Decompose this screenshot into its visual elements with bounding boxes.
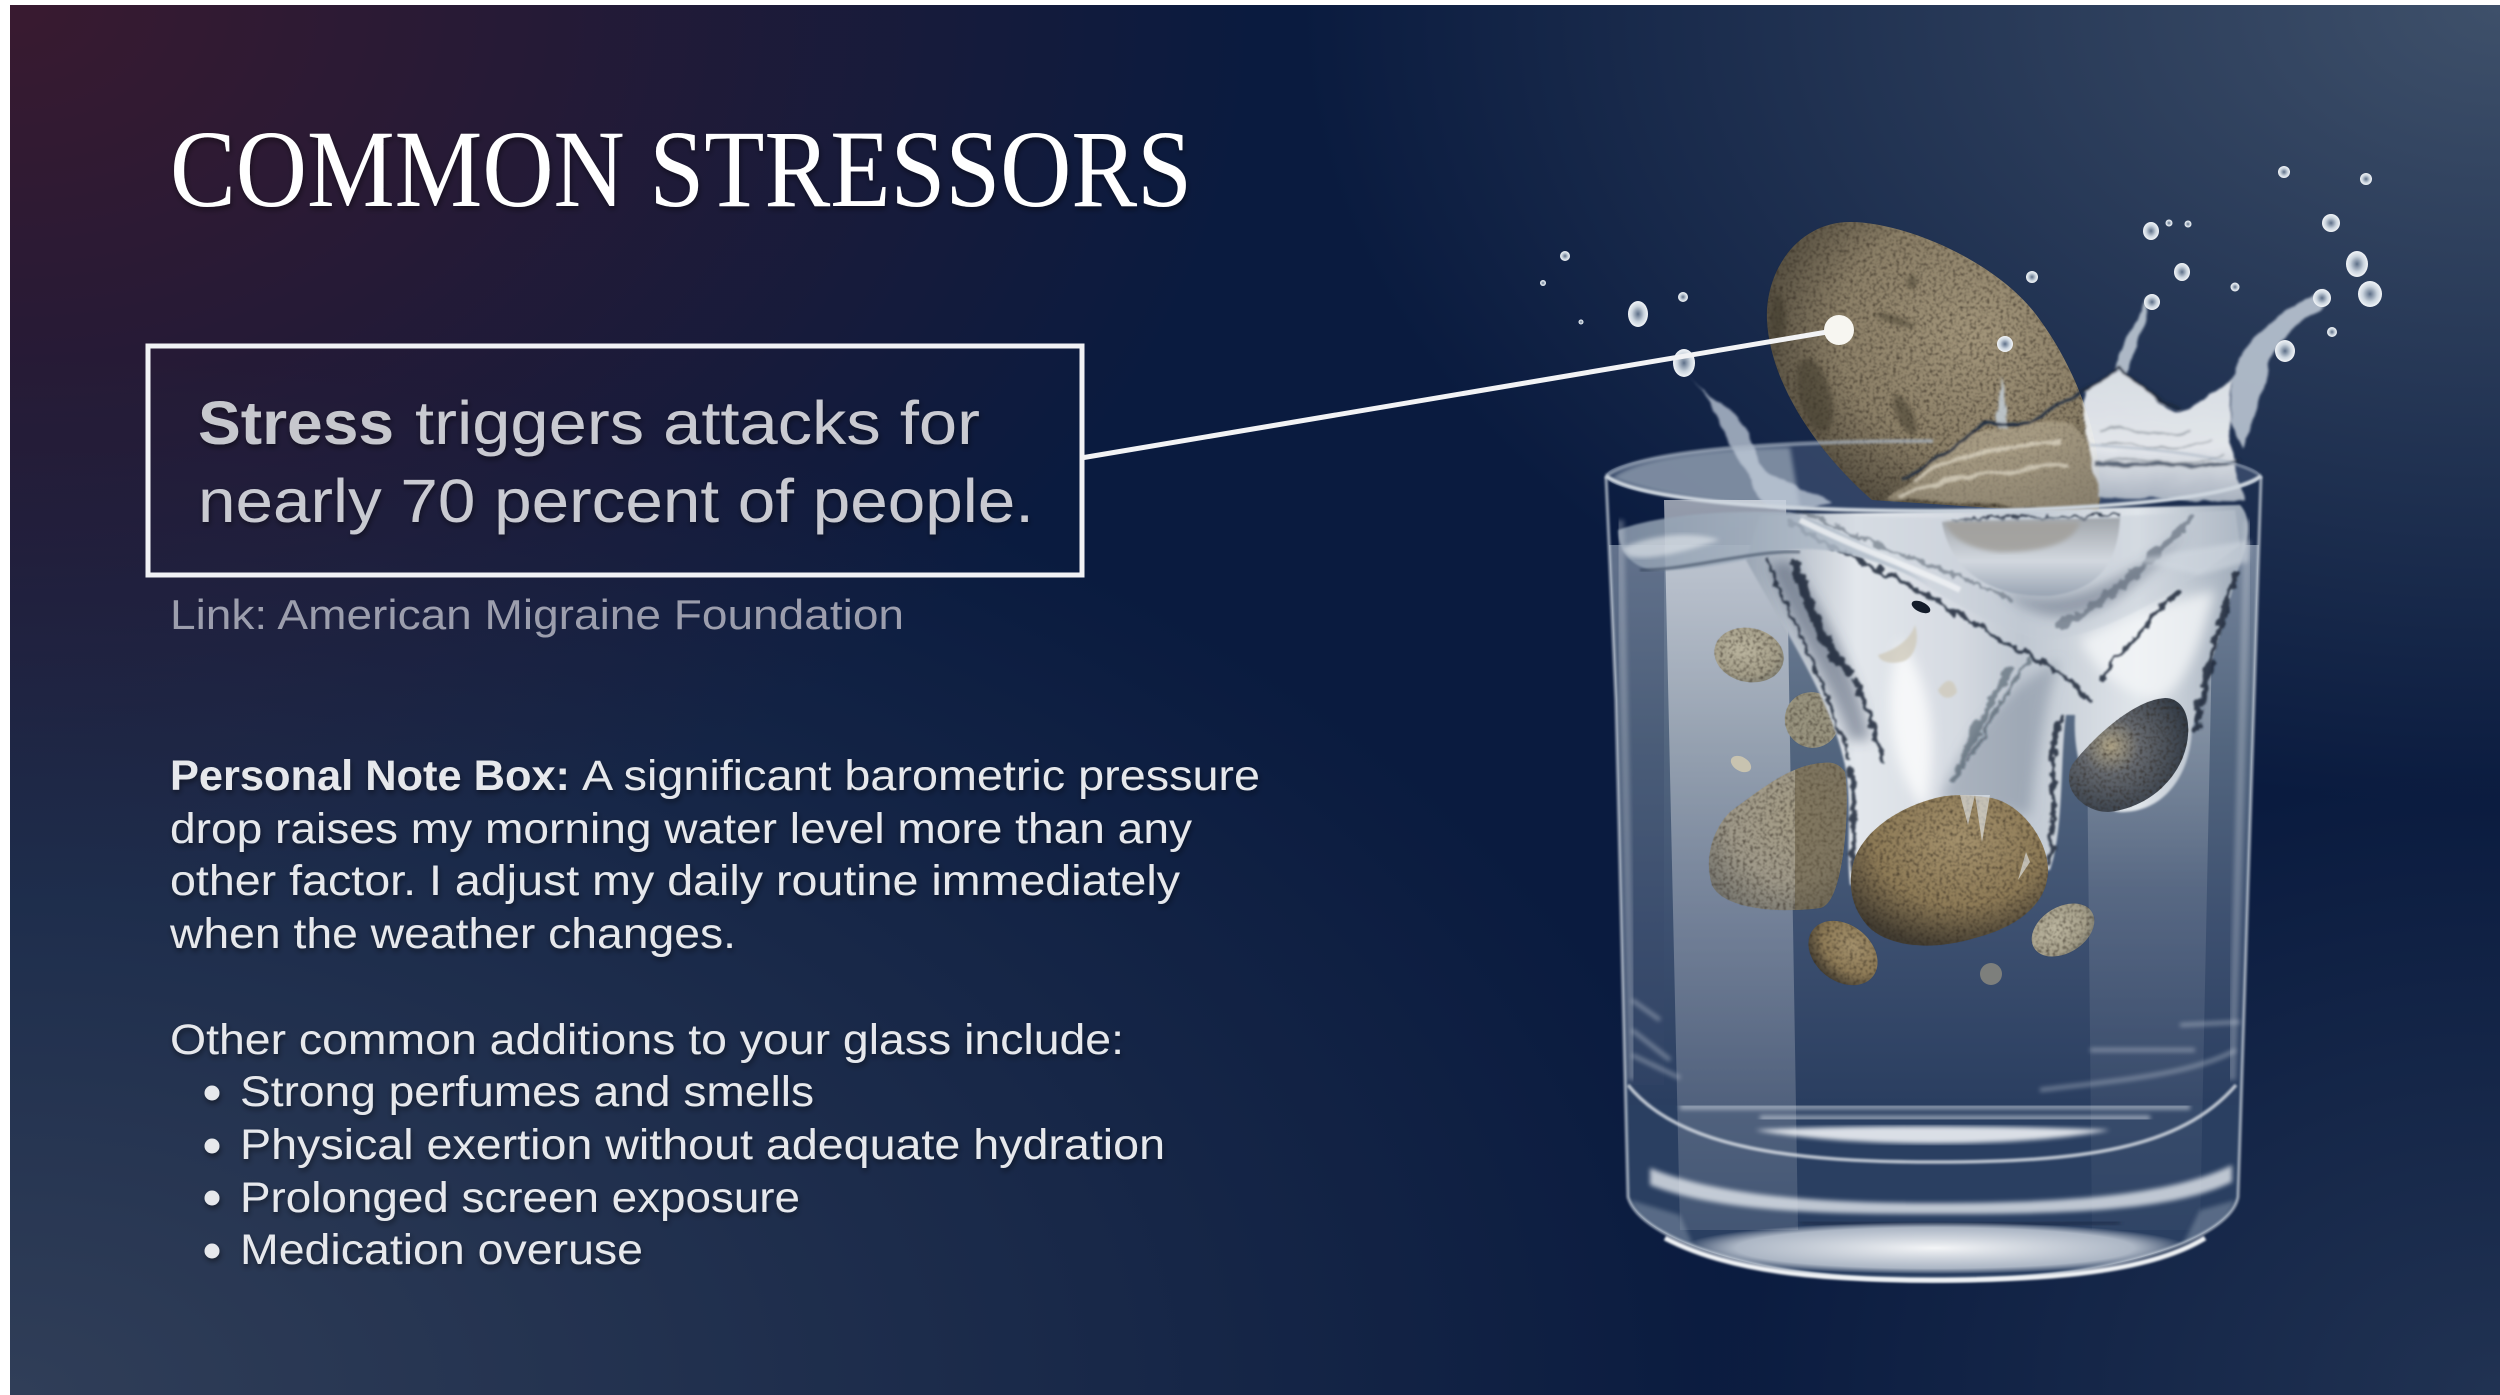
splash crown [1692, 292, 2325, 510]
list item: exertion: Physical exertion without adequate hydration [240, 1121, 1165, 1169]
bright crown [2084, 371, 2244, 500]
personal note text block: other factor. I adjust my daily routine immediately [170, 857, 1181, 905]
glass back wall [1606, 441, 2260, 511]
base upper curve [1628, 1085, 2236, 1162]
callout box: stress statistic [148, 346, 1082, 575]
callout text: Stress [198, 389, 394, 457]
right arm [2230, 292, 2325, 450]
base inner shine [1755, 1126, 2110, 1144]
water and glass body [1600, 500, 2270, 1285]
illustration: glass with stones and splash [1540, 166, 2382, 1285]
middle arm [2115, 298, 2151, 378]
glass outline [1606, 476, 2261, 1281]
water spikes on center stone [1960, 795, 2030, 880]
front rim [1606, 476, 2261, 511]
connector line from callout to stone [1084, 315, 1854, 458]
source link: Link: American Migraine Foundation [170, 591, 904, 638]
base bottom highlight [1680, 1222, 2190, 1274]
list item: screen: Prolonged screen exposure [240, 1174, 800, 1222]
wall ripple streaks [1632, 1000, 2240, 1090]
crown ripple lines [2100, 428, 2225, 463]
list intro: Other common additions to your glass include: [170, 1016, 1124, 1064]
inner wall left [1620, 520, 1632, 1080]
water column [1600, 545, 2270, 1105]
water droplets [1540, 166, 2382, 377]
small brown stone right [2022, 892, 2104, 968]
list item: perfumes: Strong perfumes and smells [240, 1068, 814, 1116]
callout text [198, 389, 1034, 535]
left arm [1692, 378, 1832, 510]
tiny pale stone [1728, 752, 1754, 776]
personal note text block: drop raises my morning water level more than any [170, 805, 1193, 853]
dark water streaks [1768, 510, 2235, 870]
grey stone [2069, 698, 2188, 812]
submerged stones [1709, 621, 1848, 910]
personal note text block [169, 752, 1260, 958]
center stone [1851, 795, 2048, 946]
crown dark edges [1900, 368, 2178, 478]
inner wall right [2232, 520, 2248, 1080]
base side sheen [1630, 1200, 2236, 1250]
glass base tint [1626, 1105, 2241, 1278]
other additions list [170, 1016, 1165, 1274]
stone dark marks [1770, 275, 1922, 438]
upper mid stone [1776, 683, 1848, 757]
upper bowl [1942, 518, 2120, 596]
left light band [1664, 500, 1798, 1230]
water surface wave [1618, 510, 2250, 640]
personal note text block: A significant barometric pressure [582, 752, 1260, 800]
callout text: nearly 70 percent of people. [198, 467, 1034, 535]
tiny grey stone [1980, 963, 2002, 985]
callout border [148, 346, 1082, 575]
funnel shading [1770, 530, 2215, 815]
base dark seam [1800, 1222, 2120, 1225]
thin stem [1998, 375, 2008, 428]
glass walls and rim [1606, 441, 2261, 1281]
callout text: triggers attacks for [415, 389, 980, 457]
bottom rim highlight [1665, 1238, 2205, 1280]
connector dot [1824, 315, 1854, 345]
list item: medication: Medication overuse [240, 1226, 643, 1274]
large falling stone [1767, 222, 2100, 515]
base inner flat bands [1680, 1107, 2190, 1118]
bubble in swirl [1910, 598, 1932, 616]
personal note text block: when the weather changes. [169, 910, 736, 958]
left stone darker section [1795, 762, 1847, 910]
base white band [1650, 1165, 2232, 1214]
title: COMMON STRESSORS [170, 108, 1192, 230]
pale stone [1709, 621, 1789, 689]
stone tinted crown [1888, 421, 2100, 510]
funnel body [1746, 505, 2248, 885]
back rim [1606, 441, 1933, 476]
pale foam fragments [1878, 625, 1957, 698]
crown tan ripple lines [1900, 440, 2070, 498]
left side zone [1610, 545, 1664, 766]
vortex funnel [1746, 505, 2248, 885]
stone seen through water [1945, 522, 2080, 552]
right light band [2088, 672, 2212, 1192]
personal note text block: Personal Note Box: [170, 752, 570, 800]
left stone [1709, 763, 1847, 910]
small brown stone left [1796, 908, 1890, 998]
